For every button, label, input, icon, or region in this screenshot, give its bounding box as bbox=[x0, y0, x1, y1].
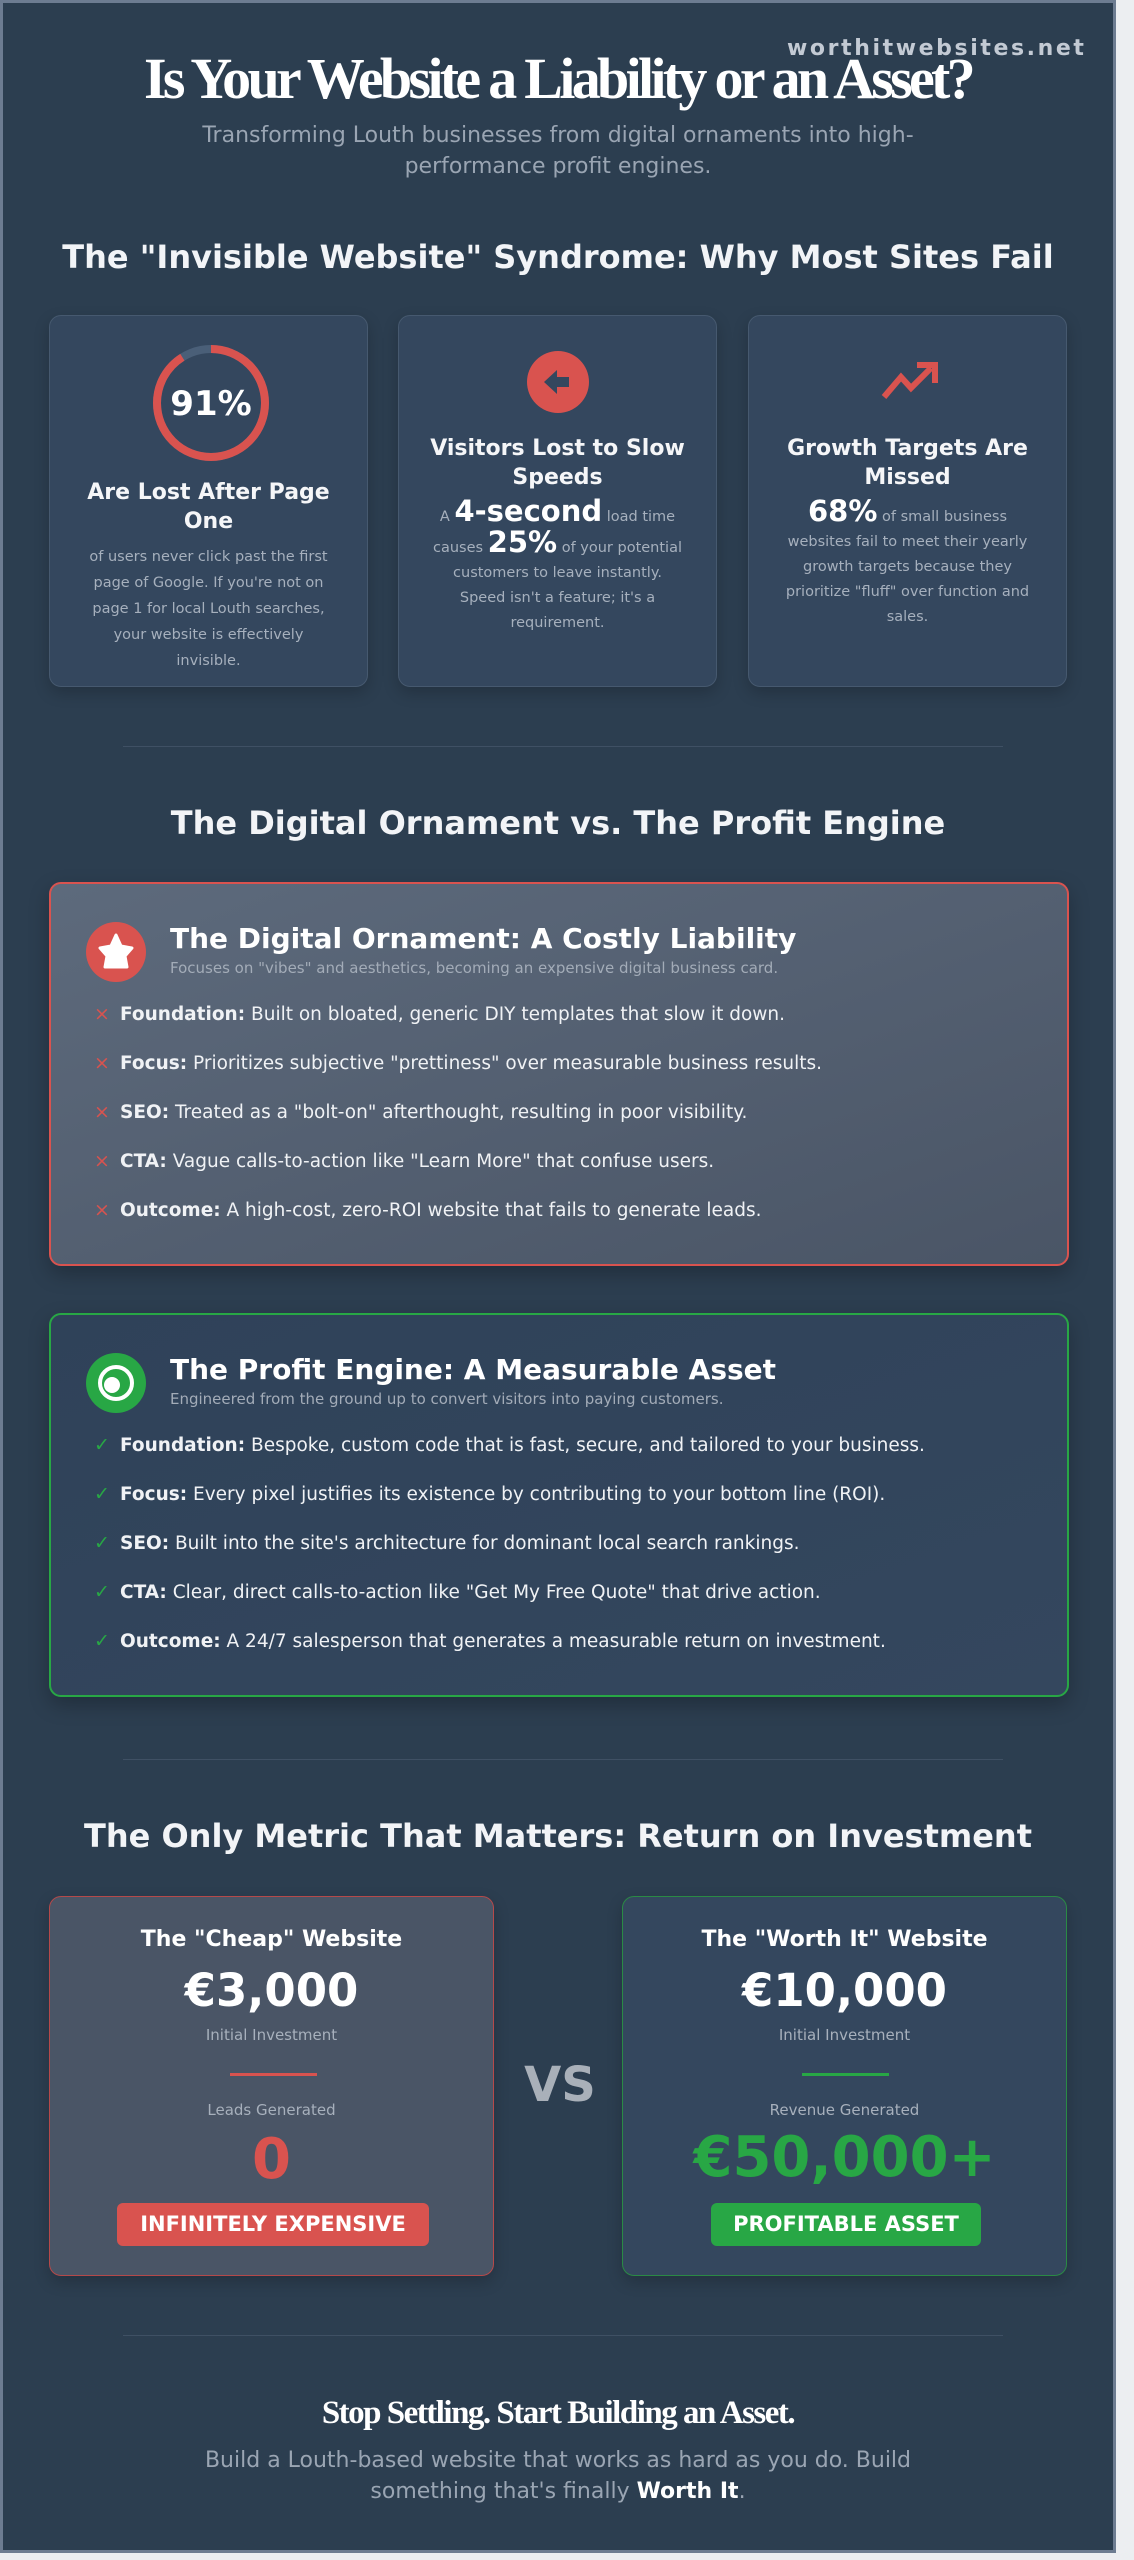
roi card: cheap: €3,000 bbox=[185, 1964, 358, 2017]
list: liability items bbox=[94, 1003, 822, 1221]
list: asset items bbox=[94, 1434, 925, 1652]
roi card: worth it: €10,000 bbox=[742, 1964, 947, 2017]
ring chart bbox=[153, 345, 269, 461]
list: liability items: CTA: Vague calls-to-action like "Learn More" that confuse users. bbox=[120, 1151, 714, 1172]
roi card: worth it: €50,000+ bbox=[694, 2125, 995, 2190]
panel subtitle: Focuses on "vibes" and aesthetics, becoming an expensive digital business card. bbox=[170, 959, 778, 977]
card: growth targets bbox=[748, 315, 1067, 687]
panel heading: The Profit Engine: A Measurable Asset bbox=[170, 1353, 776, 1386]
list: liability items: × bbox=[94, 1101, 110, 1123]
roi card: cheap: Initial Investment bbox=[206, 2026, 337, 2044]
list: liability items: × bbox=[94, 1199, 110, 1221]
list: liability items: Focus: Prioritizes subjective "prettiness" over measurable business results. bbox=[120, 1053, 822, 1074]
vs label: VS bbox=[524, 2057, 596, 2113]
roi card: worth it: Revenue Generated bbox=[770, 2101, 919, 2119]
list: asset items: CTA: Clear, direct calls-to-action like "Get My Free Quote" that drive action. bbox=[120, 1582, 821, 1603]
list: asset items: Outcome: A 24/7 salesperson that generates a measurable return on investment. bbox=[120, 1631, 886, 1652]
list: liability items: × bbox=[94, 1150, 110, 1172]
badge: profitable asset: PROFITABLE ASSET bbox=[733, 2212, 959, 2236]
card text: of users never click past the first page of Google. If you're not on page 1 for local Louth searches, your website is effectively invisible. bbox=[89, 549, 328, 669]
list: asset items: ✓ bbox=[94, 1630, 110, 1652]
roi card: worth it: The "Worth It" Website bbox=[701, 1927, 988, 1952]
roi card: cheap: The "Cheap" Website bbox=[141, 1927, 402, 1952]
roi card: cheap: Leads Generated bbox=[207, 2101, 336, 2119]
brand url: worthitwebsites.net bbox=[787, 36, 1087, 61]
list: asset items: Focus: Every pixel justifies its existence by contributing to your bottom line (ROI). bbox=[120, 1484, 885, 1505]
badge: profitable asset bbox=[711, 2203, 981, 2246]
panel: profit engine bbox=[49, 1313, 1069, 1697]
roi card: cheap: 0 bbox=[252, 2127, 291, 2192]
list: liability items: × bbox=[94, 1052, 110, 1074]
icon: red star bbox=[86, 922, 146, 982]
heading: ornament vs engine: The Digital Ornament vs. The Profit Engine bbox=[171, 804, 945, 842]
list: liability items: × bbox=[94, 1003, 110, 1025]
list: asset items: ✓ bbox=[94, 1434, 110, 1456]
list: asset items: ✓ bbox=[94, 1581, 110, 1603]
card text: 68% of small business websites fail to meet their yearly growth targets because they prioritize "fluff" over function and sales. bbox=[786, 494, 1029, 625]
icon: back arrow circle bbox=[527, 351, 589, 413]
list: liability items: Foundation: Built on bloated, generic DIY templates that slow it down. bbox=[120, 1004, 785, 1025]
subtitle: Transforming Louth businesses from digital ornaments into high-performance profit engines. bbox=[202, 123, 914, 179]
badge: infinitely expensive bbox=[117, 2203, 429, 2246]
card text: Speed isn't a feature; it's a requirement. bbox=[460, 590, 655, 631]
list: liability items: Outcome: A high-cost, zero-ROI website that fails to generate leads. bbox=[120, 1200, 762, 1221]
panel heading: The Digital Ornament: A Costly Liability bbox=[170, 922, 796, 955]
roi card: worth it: Initial Investment bbox=[779, 2026, 910, 2044]
card title: Are Lost After Page One bbox=[87, 480, 330, 534]
list: asset items: ✓ bbox=[94, 1483, 110, 1505]
roi card: cheap bbox=[49, 1896, 494, 2276]
list: liability items: SEO: Treated as a "bolt-on" afterthought, resulting in poor visibility. bbox=[120, 1102, 747, 1123]
roi card: worth it bbox=[622, 1896, 1067, 2276]
card: slow speeds bbox=[398, 315, 717, 687]
list: asset items: Foundation: Bespoke, custom code that is fast, secure, and tailored to your business. bbox=[120, 1435, 925, 1456]
panel subtitle: Engineered from the ground up to convert visitors into paying customers. bbox=[170, 1390, 723, 1408]
card title: Growth Targets Are Missed bbox=[787, 436, 1028, 490]
heading: invisible website: The "Invisible Website" Syndrome: Why Most Sites Fail bbox=[62, 238, 1054, 276]
footer heading: Stop Settling. Start Building an Asset. bbox=[322, 2395, 794, 2431]
card: 91% bbox=[49, 315, 368, 687]
badge: infinitely expensive: INFINITELY EXPENSIVE bbox=[140, 2212, 406, 2236]
ring chart: 91% bbox=[170, 384, 252, 424]
icon: green target bbox=[86, 1353, 146, 1413]
heading: ROI: The Only Metric That Matters: Return on Investment bbox=[84, 1817, 1032, 1855]
card title: Visitors Lost to Slow Speeds bbox=[430, 436, 685, 490]
list: asset items: SEO: Built into the site's architecture for dominant local search rankings. bbox=[120, 1533, 800, 1554]
icon: trend arrow bbox=[882, 362, 938, 399]
title: Is Your Website a Liability or an Asset? bbox=[144, 46, 972, 111]
list: asset items: ✓ bbox=[94, 1532, 110, 1554]
card text bbox=[433, 494, 682, 631]
panel: digital ornament bbox=[49, 882, 1069, 1266]
card text: A 4-second load time causes 25% of your potential customers to leave instantly. bbox=[433, 494, 682, 581]
footer text: Build a Louth-based website that works as hard as you do. Build something that's finally Worth It. bbox=[205, 2448, 911, 2504]
